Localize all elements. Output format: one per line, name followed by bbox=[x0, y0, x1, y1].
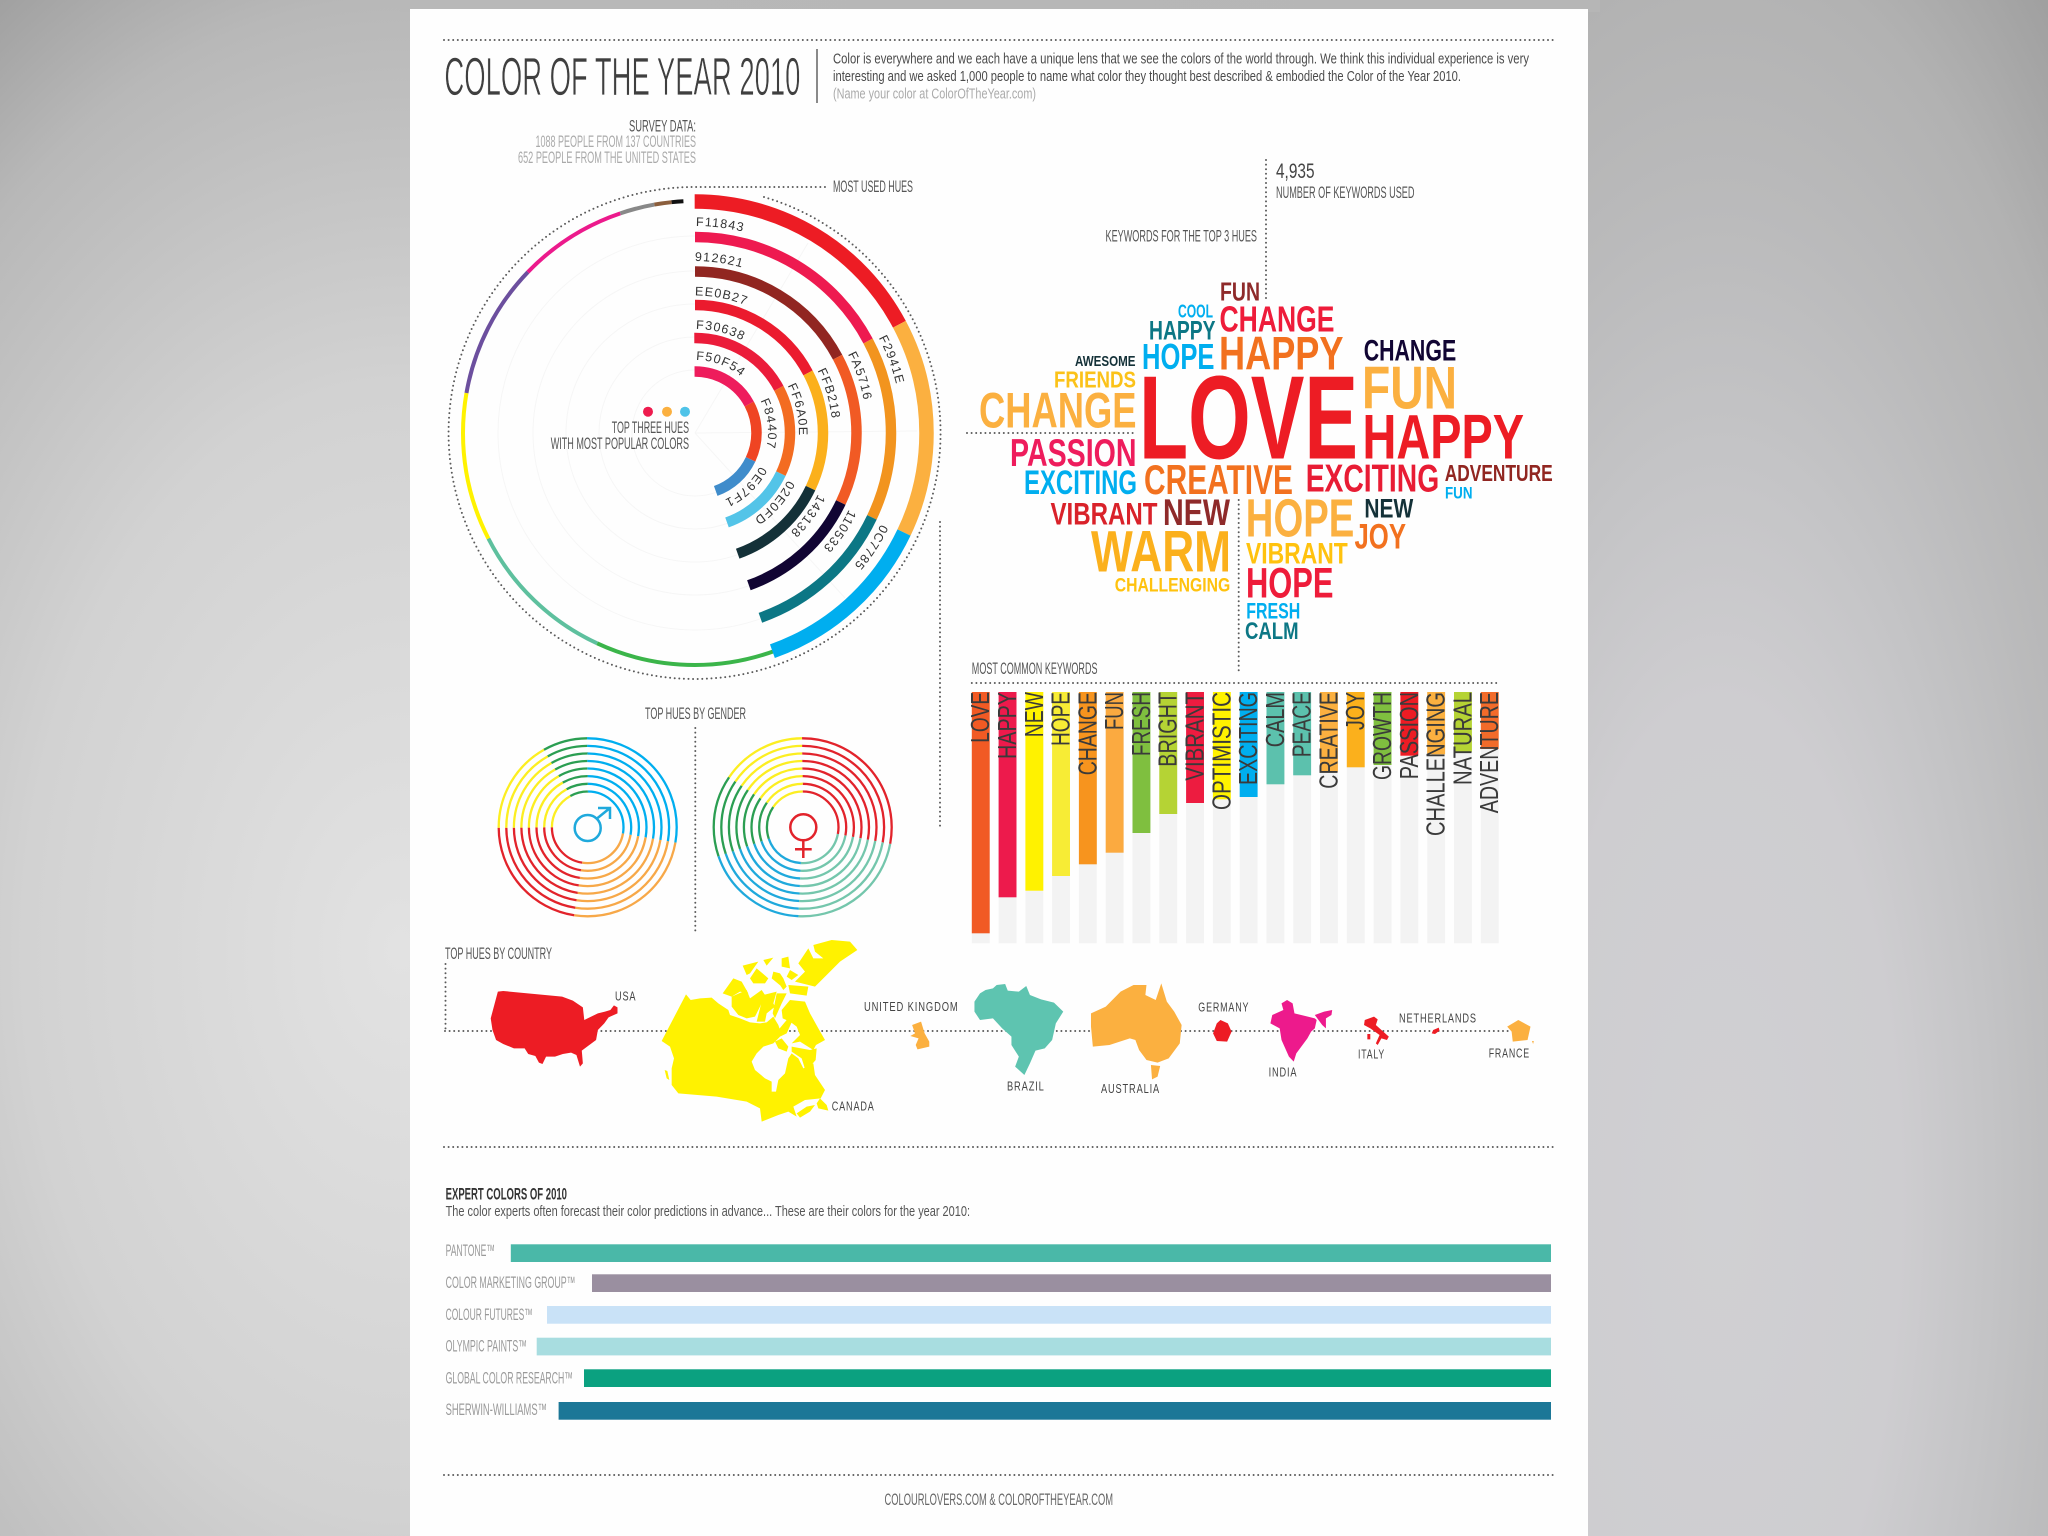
word cloud: NEW bbox=[1163, 491, 1231, 533]
white poster panel bbox=[410, 9, 1588, 1536]
word cloud: CHALLENGING bbox=[1115, 575, 1230, 597]
expert colors heading: EXPERT COLORS OF 2010 bbox=[446, 1185, 567, 1203]
bar: peace: PEACE bbox=[1287, 692, 1317, 757]
footer: COLOURLOVERS.COM & COLOROFTHEYEAR.COM bbox=[884, 1491, 1113, 1509]
word cloud: FUN bbox=[1445, 483, 1472, 502]
female hue rings bbox=[714, 738, 892, 916]
bar: creative bbox=[1313, 692, 1343, 943]
word cloud: WARM bbox=[1091, 520, 1231, 585]
word cloud: CHANGE bbox=[1364, 335, 1456, 368]
word cloud: AWESOME bbox=[1075, 353, 1136, 370]
intro text: (Name your color at ColorOfTheYear.com) bbox=[833, 86, 1036, 102]
hex code labels: F11843 bbox=[696, 217, 744, 231]
top three hue dots bbox=[643, 407, 690, 417]
row: Global Color Research: GLOBAL COLOR RESEARCH™ bbox=[446, 1369, 573, 1387]
intro text: interesting and we asked 1,000 people to name what color they thought best described & embodied the Color of the Year 2010. bbox=[833, 69, 1461, 85]
bar: adventure bbox=[1474, 692, 1504, 943]
hex code labels: 0E97F1 bbox=[726, 468, 766, 506]
survey data text: SURVEY DATA: bbox=[629, 118, 696, 136]
intro text bbox=[833, 52, 1530, 102]
bar: peace bbox=[1287, 692, 1317, 943]
ring 2 bbox=[499, 237, 891, 629]
bar: adventure: ADVENTURE bbox=[1474, 692, 1504, 813]
bar: growth bbox=[1367, 692, 1397, 943]
hex code labels: 02E0FD bbox=[756, 482, 794, 524]
bar: new bbox=[1019, 692, 1049, 943]
country labels: CANADA bbox=[832, 1099, 875, 1114]
country labels: AUSTRALIA bbox=[1101, 1081, 1160, 1096]
map: Canada bbox=[662, 940, 857, 1122]
word cloud: CREATIVE bbox=[1144, 456, 1293, 503]
top hues by country label: TOP HUES BY COUNTRY bbox=[445, 945, 552, 963]
hex code labels: 110533 bbox=[824, 510, 856, 552]
row: Color Marketing Group: COLOR MARKETING GROUP™ bbox=[446, 1274, 576, 1292]
bar: happy: HAPPY bbox=[992, 692, 1022, 759]
bar: passion: PASSION bbox=[1394, 692, 1424, 779]
word cloud: HOPE bbox=[1246, 489, 1354, 549]
top hues by gender label: TOP HUES BY GENDER bbox=[645, 705, 746, 723]
survey data text: 652 PEOPLE FROM THE UNITED STATES bbox=[518, 149, 696, 167]
row: Olympic Paints bbox=[446, 1338, 1551, 1356]
bar: challenging bbox=[1421, 692, 1451, 943]
faint guide circles bbox=[498, 236, 917, 630]
word cloud: COOL bbox=[1178, 301, 1213, 322]
dotted outline bbox=[449, 187, 941, 679]
bar: challenging: CHALLENGING bbox=[1421, 692, 1451, 836]
bar: bright bbox=[1153, 692, 1183, 943]
ring 6 bbox=[634, 372, 756, 494]
word cloud: EXCITING bbox=[1024, 464, 1137, 502]
word cloud: EXCITING bbox=[1306, 458, 1439, 501]
country labels: ITALY bbox=[1358, 1046, 1385, 1061]
hex code labels: FF6A0E bbox=[788, 382, 808, 435]
map: Australia bbox=[1091, 983, 1182, 1079]
bar: fun: FUN bbox=[1099, 692, 1129, 730]
bar: love: LOVE bbox=[965, 692, 995, 743]
word cloud: HAPPY bbox=[1362, 402, 1524, 472]
bar: exciting: EXCITING bbox=[1233, 692, 1263, 785]
country labels: GERMANY bbox=[1198, 1000, 1249, 1015]
bar: calm: CALM bbox=[1260, 692, 1290, 747]
bar: new: NEW bbox=[1019, 692, 1049, 737]
word cloud bbox=[979, 277, 1553, 645]
hex code labels: F2941E bbox=[879, 334, 904, 384]
country maps bbox=[491, 940, 1534, 1122]
expert colors heading bbox=[446, 1185, 970, 1220]
bar: hope bbox=[1046, 692, 1076, 943]
word cloud: FRESH bbox=[1246, 598, 1300, 623]
country labels: FRANCE bbox=[1489, 1045, 1530, 1060]
keyword bar chart bbox=[965, 692, 1504, 943]
intro text: Color is everywhere and we each have a unique lens that we see the colors of the world through. We think this individual experience is very bbox=[833, 52, 1530, 68]
country labels: NETHERLANDS bbox=[1399, 1011, 1477, 1026]
word cloud: ADVENTURE bbox=[1445, 460, 1553, 486]
hex code labels: F84407 bbox=[761, 398, 777, 448]
hex code labels: 912621 bbox=[696, 252, 742, 268]
bar: vibrant: VIBRANT bbox=[1180, 692, 1210, 781]
word cloud: VIBRANT bbox=[1050, 495, 1158, 531]
keyword count: 4,935 bbox=[1276, 159, 1315, 183]
word cloud: CHANGE bbox=[979, 381, 1136, 438]
country labels: USA bbox=[615, 989, 636, 1004]
word cloud: FUN bbox=[1220, 277, 1260, 307]
ring 1 bbox=[464, 202, 926, 664]
word cloud: FRIENDS bbox=[1054, 366, 1136, 392]
ring 4 bbox=[567, 305, 823, 561]
map: USA bbox=[491, 991, 617, 1067]
map: Germany bbox=[1213, 1020, 1232, 1042]
top three hues caption: WITH MOST POPULAR COLORS bbox=[551, 435, 689, 453]
hex code labels bbox=[696, 217, 904, 570]
map: France bbox=[1507, 1020, 1534, 1044]
row: Pantone bbox=[446, 1242, 1551, 1262]
ring 3 bbox=[534, 272, 856, 594]
survey data text: 1088 PEOPLE FROM 137 COUNTRIES bbox=[536, 133, 696, 151]
hex code labels: 143138 bbox=[792, 495, 824, 537]
hex code labels: F50F54 bbox=[697, 351, 745, 376]
word cloud: PASSION bbox=[1010, 432, 1136, 475]
row: Sherwin-Williams bbox=[446, 1401, 1551, 1420]
icon: female symbol bbox=[790, 814, 816, 858]
keyword count: NUMBER OF KEYWORDS USED bbox=[1276, 184, 1415, 202]
country labels bbox=[615, 989, 1530, 1114]
word cloud: HOPE bbox=[1246, 559, 1334, 606]
bar: optimistic bbox=[1206, 692, 1236, 943]
word cloud: LOVE bbox=[1139, 352, 1358, 484]
most used hues label: MOST USED HUES bbox=[833, 178, 913, 196]
bar: fun bbox=[1099, 692, 1129, 943]
bar: creative: CREATIVE bbox=[1313, 692, 1343, 789]
bar: hope: HOPE bbox=[1046, 692, 1076, 746]
row: Pantone: PANTONE™ bbox=[446, 1242, 495, 1260]
title divider bbox=[816, 49, 818, 103]
bar: joy: JOY bbox=[1340, 692, 1370, 730]
expert colors bars bbox=[446, 1242, 1551, 1420]
bar: passion bbox=[1394, 692, 1424, 943]
map: Netherlands bbox=[1432, 1028, 1439, 1034]
hex code labels: FFB218 bbox=[818, 368, 840, 418]
survey data text bbox=[518, 118, 696, 167]
keywords label: KEYWORDS FOR THE TOP 3 HUES bbox=[1106, 228, 1257, 246]
map: UK bbox=[910, 1022, 929, 1049]
keyword count bbox=[1276, 159, 1415, 202]
top three hues caption: TOP THREE HUES bbox=[612, 419, 689, 437]
word cloud: VIBRANT bbox=[1246, 537, 1348, 570]
hex code labels: F30638 bbox=[696, 320, 744, 340]
map: Brazil bbox=[974, 984, 1063, 1075]
most common keywords label: MOST COMMON KEYWORDS bbox=[972, 660, 1098, 678]
header bbox=[444, 47, 1530, 107]
hex code labels: 0C7785 bbox=[856, 526, 888, 570]
bar: exciting bbox=[1233, 692, 1263, 943]
bar: calm bbox=[1260, 692, 1290, 943]
bar: fresh bbox=[1126, 692, 1156, 943]
background right bbox=[1580, 0, 2048, 1536]
title: COLOR OF THE YEAR 2010 bbox=[444, 47, 800, 107]
word cloud: HOPE bbox=[1142, 336, 1214, 377]
top three hues caption bbox=[551, 419, 689, 453]
map: Italy bbox=[1364, 1017, 1389, 1045]
row: Colour Futures bbox=[446, 1306, 1551, 1324]
male hue rings bbox=[499, 738, 677, 916]
row: Global Color Research bbox=[446, 1369, 1551, 1387]
bar: natural bbox=[1447, 692, 1477, 943]
word cloud: FUN bbox=[1362, 353, 1457, 421]
bar: optimistic: OPTIMISTIC bbox=[1206, 692, 1236, 810]
icon: male symbol bbox=[575, 808, 610, 841]
bar: love bbox=[965, 692, 995, 943]
word cloud: CALM bbox=[1245, 618, 1298, 645]
expert colors heading: The color experts often forecast their color predictions in advance... These are their colors for the year 2010: bbox=[446, 1203, 970, 1220]
bar: change: CHANGE bbox=[1072, 692, 1102, 775]
word cloud: CHANGE bbox=[1220, 299, 1334, 340]
word cloud: HAPPY bbox=[1149, 314, 1216, 345]
background left bbox=[0, 0, 420, 1536]
hex code labels: EE0B27 bbox=[696, 286, 748, 304]
country labels: BRAZIL bbox=[1007, 1079, 1045, 1094]
bar: bright: BRIGHT bbox=[1153, 692, 1183, 767]
bar: happy bbox=[992, 692, 1022, 943]
country labels: INDIA bbox=[1269, 1065, 1297, 1080]
row: Colour Futures: COLOUR FUTURES™ bbox=[446, 1306, 533, 1324]
ring 5 bbox=[600, 338, 790, 528]
bar: vibrant bbox=[1180, 692, 1210, 943]
bar: joy bbox=[1340, 692, 1370, 943]
row: Color Marketing Group bbox=[446, 1274, 1551, 1292]
country labels: UNITED KINGDOM bbox=[864, 999, 959, 1014]
bar: fresh: FRESH bbox=[1126, 692, 1156, 756]
word cloud: NEW bbox=[1364, 493, 1414, 523]
map: India bbox=[1270, 1000, 1332, 1062]
background top band bbox=[400, 0, 1600, 12]
radial hues chart bbox=[448, 186, 942, 680]
bar: growth: GROWTH bbox=[1367, 692, 1397, 780]
bar: natural: NATURAL bbox=[1447, 692, 1477, 785]
bar: change bbox=[1072, 692, 1102, 943]
word cloud: HAPPY bbox=[1219, 327, 1344, 380]
row: Olympic Paints: OLYMPIC PAINTS™ bbox=[446, 1338, 527, 1356]
outer thin ring of all hues bbox=[463, 201, 927, 665]
row: Sherwin-Williams: SHERWIN-WILLIAMS™ bbox=[446, 1401, 547, 1419]
hex code labels: FA5716 bbox=[848, 351, 872, 399]
word cloud: JOY bbox=[1354, 517, 1406, 556]
